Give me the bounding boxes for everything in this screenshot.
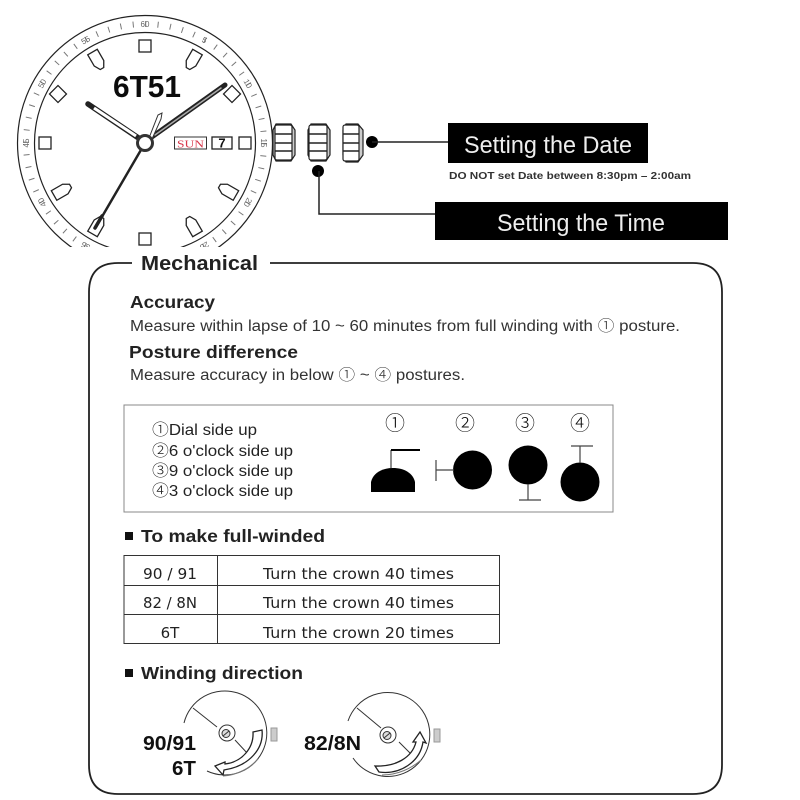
bezel numbers: 40 <box>36 196 48 208</box>
second hand <box>95 113 162 228</box>
winding table: Turn the crown 40 times <box>262 594 454 612</box>
posture 3 icon <box>508 407 548 500</box>
bezel numbers: 35 <box>79 239 92 252</box>
day window: SUN <box>177 138 204 150</box>
label: setting the date: Setting the Date <box>464 132 632 159</box>
posture 2 icon: ② <box>455 407 475 436</box>
label: setting the time <box>435 202 728 240</box>
full-winded heading: To make full-winded <box>141 526 325 546</box>
posture 4 icon <box>560 407 600 502</box>
label: setting the time: Setting the Time <box>497 210 665 237</box>
posture 4 icon: ④ <box>570 407 590 436</box>
accuracy text: Measure within lapse of 10 ~ 60 minutes from full winding with ① posture. <box>130 314 680 336</box>
hour markers <box>39 40 251 245</box>
day window <box>174 137 206 150</box>
winding table: 90 / 91 <box>143 565 197 583</box>
posture 2 icon <box>436 407 492 490</box>
bezel numbers: 50 <box>36 77 49 90</box>
posture list: ②6 o'clock side up <box>152 437 293 461</box>
posture 1 icon <box>371 407 420 492</box>
label: setting the date <box>448 123 648 163</box>
date window <box>212 136 232 150</box>
date connector <box>366 136 449 148</box>
centre hub <box>138 136 152 150</box>
crown positions <box>273 124 363 162</box>
bezel numbers: 55 <box>80 34 92 46</box>
rotor diagram: 82/8N <box>348 692 440 776</box>
posture list <box>152 416 293 501</box>
model name: 6T51 <box>113 69 181 104</box>
posture difference heading: Posture difference <box>129 342 298 362</box>
date window: 7 <box>218 136 226 150</box>
crown position 2 <box>308 124 330 161</box>
counter-clockwise arrow <box>375 732 426 772</box>
warning note: DO NOT set Date between 8:30pm – 2:00am <box>449 170 691 182</box>
posture difference text: Measure accuracy in below ① ~ ④ postures. <box>130 363 465 385</box>
posture list: ①Dial side up <box>152 416 257 440</box>
bezel numbers <box>22 20 268 252</box>
panel outline <box>89 263 722 794</box>
bezel numbers: 10 <box>242 78 254 90</box>
bezel numbers: 20 <box>241 196 254 209</box>
winding direction heading: Winding direction <box>141 663 303 683</box>
winding table: Turn the crown 40 times <box>262 565 454 583</box>
bezel numbers: 60 <box>141 20 150 29</box>
winding table: Turn the crown 20 times <box>262 624 454 642</box>
panel heading: Mechanical <box>141 252 258 275</box>
bezel rings and ticks <box>18 16 272 270</box>
crown position 3 <box>343 124 363 162</box>
posture list: ③9 o'clock side up <box>152 457 293 481</box>
bezel numbers: 5 <box>200 35 209 46</box>
crown position 1 <box>273 124 295 161</box>
dial clip mask <box>0 247 330 277</box>
minute hand <box>149 85 225 139</box>
panel: mechanical <box>89 252 722 794</box>
winding table: 6T <box>161 624 180 642</box>
rotor diagram: 90/91 and 6T <box>184 691 277 776</box>
posture box <box>124 405 613 512</box>
hour hand <box>86 102 142 140</box>
posture 1 icon: ① <box>385 407 405 436</box>
bezel numbers: 45 <box>22 138 31 147</box>
bezel numbers: 15 <box>259 139 268 148</box>
posture 3 icon: ③ <box>515 407 535 436</box>
accuracy heading: Accuracy <box>130 292 215 312</box>
winding table: 82 / 8N <box>143 594 197 612</box>
posture list: ④3 o'clock side up <box>152 477 293 501</box>
clockwise arrow <box>215 730 262 775</box>
bezel numbers: 25 <box>198 240 210 252</box>
rotor label: 90/91: 90/91 <box>143 733 196 755</box>
rotor label: 82/8N: 82/8N <box>304 733 361 755</box>
time connector <box>312 165 436 214</box>
watch dial <box>18 16 272 270</box>
winding table <box>124 556 500 644</box>
rotor label: 6T: 6T <box>172 758 196 780</box>
